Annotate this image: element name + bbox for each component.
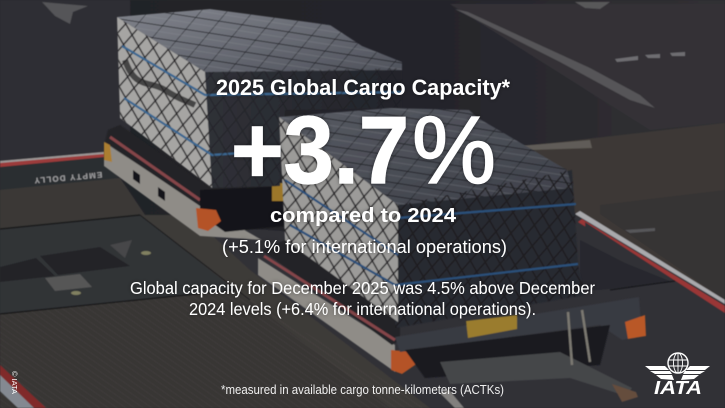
copyright: © IATA bbox=[10, 371, 18, 394]
rear side face bbox=[205, 68, 402, 188]
rear dolly bbox=[104, 125, 285, 240]
background photo: airport apron: EMPTY DOLLY bbox=[33, 170, 103, 185]
cargo pallet (front) bbox=[258, 108, 646, 402]
cargo pallet (rear) bbox=[104, 9, 402, 240]
december paragraph bbox=[130, 278, 595, 319]
front top face bbox=[279, 108, 572, 205]
december paragraph: 2024 levels (+6.4% for international operations). bbox=[189, 299, 536, 319]
front front face bbox=[279, 117, 398, 322]
icon: IATA logo: IATA bbox=[654, 378, 702, 398]
comparison label: compared to 2024 bbox=[270, 205, 457, 227]
rear top face bbox=[117, 9, 402, 72]
rear front face bbox=[117, 17, 212, 188]
december paragraph: Global capacity for December 2025 was 4.5% above December bbox=[130, 278, 595, 298]
front side face bbox=[395, 170, 585, 328]
headline figure: % bbox=[412, 97, 496, 204]
headline figure: +3.7 bbox=[231, 97, 409, 204]
title: 2025 Global Cargo Capacity* bbox=[216, 75, 510, 100]
icon: IATA logo bbox=[645, 353, 710, 398]
international note: (+5.1% for international operations) bbox=[222, 237, 507, 257]
footnote: *measured in available cargo tonne-kilometers (ACTKs) bbox=[221, 382, 504, 397]
front dolly bbox=[258, 240, 646, 402]
